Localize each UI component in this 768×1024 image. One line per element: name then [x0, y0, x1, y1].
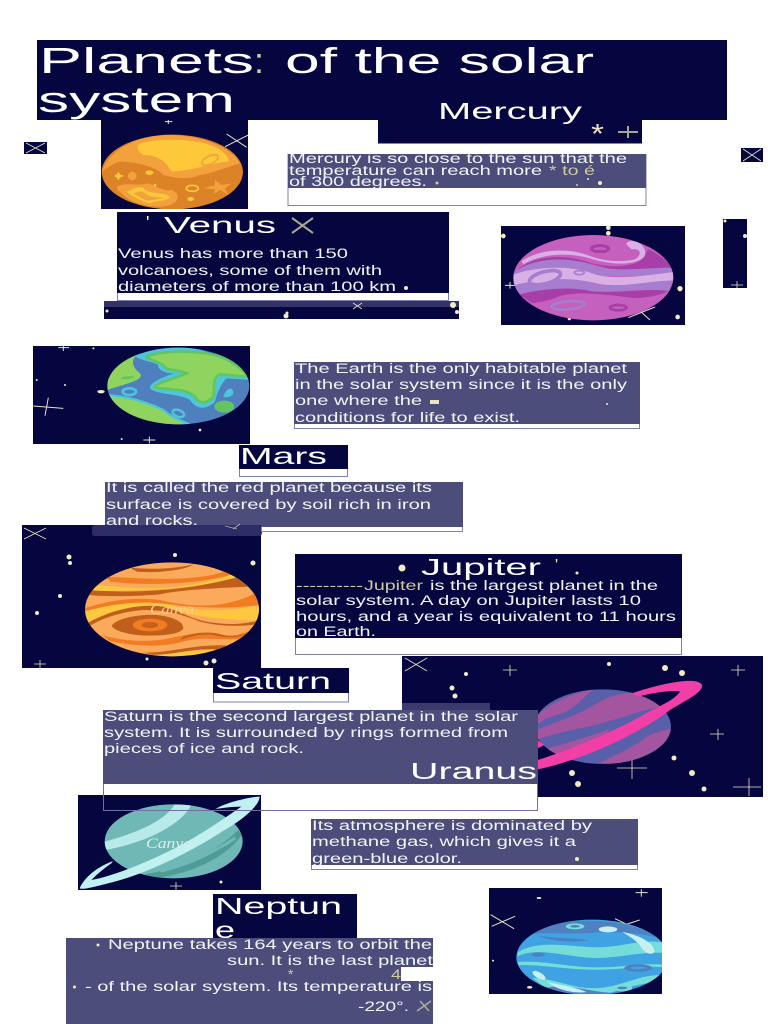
panel: Venus heading and text: Venus has more than 150	[118, 246, 348, 261]
panel: Mercury text	[288, 151, 646, 206]
panel: title	[37, 40, 727, 120]
heading: title line 2: system	[38, 79, 235, 120]
panel: Earth text: conditions for life to exist.	[295, 410, 520, 425]
panel: Uranus text: Its atmosphere is dominated by	[312, 818, 592, 833]
panel: Saturn text and Uranus heading: system. It is surrounded by rings formed from	[104, 725, 508, 740]
panel: Neptune text: Neptune takes 164 years to orbit the	[108, 937, 432, 952]
image: Venus planet	[501, 225, 685, 325]
panel: Earth text: in the solar system since it is the only	[295, 377, 627, 392]
watermark: Canva on Jupiter: Canva	[150, 602, 194, 618]
panel: Neptune text	[66, 937, 433, 1024]
panel: Neptune text: sun. It is the last planet	[227, 953, 433, 968]
panel: Mercury heading: Mercury	[438, 98, 583, 124]
panel: Uranus text: methane gas, which gives it a	[312, 834, 577, 849]
panel: Venus heading and text: diameters of more than 100 km	[118, 279, 396, 294]
image: Earth planet	[33, 345, 250, 444]
panel: Earth text: one where the	[295, 393, 422, 408]
panel: Mars heading	[239, 443, 348, 476]
icon: small star tile right	[741, 148, 763, 162]
heading: title line 1: of the solar	[285, 40, 594, 81]
panel: Jupiter heading and text: ----------	[296, 578, 363, 593]
panel: Saturn text and Uranus heading: Saturn is the second largest planet in the solar	[104, 709, 519, 724]
panel: Mars heading: Mars	[240, 443, 327, 469]
panel: Mercury heading	[378, 98, 642, 149]
image: Uranus planet	[78, 795, 261, 890]
panel: Jupiter heading and text: solar system. A day on Jupiter lasts 10	[296, 593, 641, 608]
panel: Jupiter heading and text	[295, 554, 682, 654]
panel: Mercury text: of 300 degrees.	[289, 174, 427, 189]
panel: Saturn text and Uranus heading	[103, 703, 538, 784]
panel: Mercury text: temperature can reach more	[289, 163, 542, 178]
panel: Jupiter heading and text: Jupiter	[421, 554, 542, 580]
panel: Jupiter heading and text: hours, and a year is equivalent to 11 hours	[296, 609, 676, 624]
image: Jupiter planet	[22, 523, 261, 668]
panel: Earth text: The Earth is the only habitable planet	[295, 361, 627, 376]
panel: narrow star strip right	[723, 219, 747, 288]
panel: Neptune text: - of the solar system. Its temperature is	[85, 979, 432, 994]
panel: Jupiter heading and text: '	[555, 557, 558, 574]
panel: Venus heading and text	[117, 212, 449, 300]
panel: Saturn text and Uranus heading: pieces of ice and rock.	[104, 741, 304, 756]
panel: Venus heading and text: '	[146, 213, 149, 233]
panel: Venus heading and text: volcanoes, some of them with	[118, 263, 382, 278]
panel: Venus heading and text: Venus	[164, 212, 276, 238]
image: Saturn planet	[402, 656, 763, 797]
panel: Mars text: and rocks.	[106, 513, 198, 528]
panel: Jupiter heading and text: on Earth.	[296, 624, 376, 639]
image: Mercury planet	[101, 119, 248, 209]
panel: Neptune heading: e	[215, 917, 235, 943]
panel: Jupiter heading and text: Jupiter	[364, 578, 424, 593]
panel: Mars text: surface is covered by soil rich in iron	[106, 497, 431, 512]
panel: Mercury text: * to é	[549, 163, 595, 178]
panel: Neptune heading: Neptun	[215, 893, 342, 919]
panel: dark strip under Venus	[104, 301, 459, 319]
heading: title line 1: Planets	[39, 40, 254, 81]
panel: Saturn heading	[213, 668, 349, 702]
panel: Neptune heading	[213, 893, 357, 943]
panel: Neptune text: -220°.	[358, 999, 409, 1014]
panel: Jupiter heading and text: is the largest planet in the	[430, 578, 658, 593]
panel: Mars text	[92, 480, 463, 536]
panel: Mercury heading: *	[591, 118, 604, 149]
panel: Earth text	[294, 361, 640, 428]
image: Neptune planet	[489, 888, 668, 996]
panel: Saturn heading: Saturn	[215, 668, 331, 694]
panel: Uranus text	[311, 818, 638, 870]
panel: Neptune text: 4	[391, 967, 402, 982]
panel: Saturn box lower white area	[104, 784, 538, 810]
icon: small star tile left	[24, 142, 47, 154]
panel: Mercury text: Mercury is so close to the sun that the	[289, 151, 627, 166]
panel: Neptune text: *	[288, 967, 294, 982]
heading: title line 1: :	[254, 40, 264, 81]
panel: Uranus text: green-blue color.	[312, 851, 462, 866]
panel: Mars text: It is called the red planet because its	[106, 480, 432, 495]
watermark: Canva on Uranus: Canva	[146, 836, 192, 852]
panel: Saturn text and Uranus heading: Uranus	[410, 758, 537, 784]
heading: title line 1	[39, 40, 594, 81]
